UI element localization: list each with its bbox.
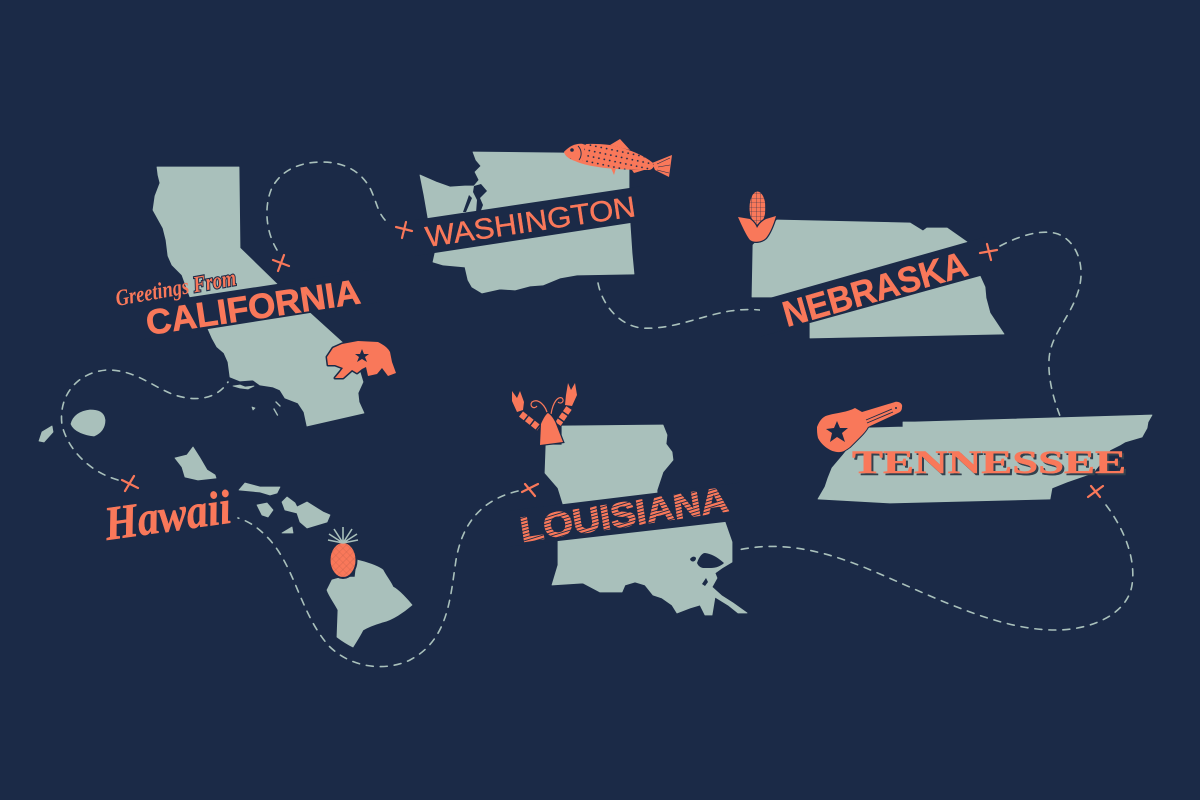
Louisiana state shape (545, 425, 747, 615)
Nebraska title: NEBRASKA (778, 243, 972, 335)
panel: California (114, 167, 396, 426)
icon: crawfish (512, 383, 577, 445)
panel: Nebraska (738, 192, 1004, 338)
panel: Louisiana (510, 383, 747, 615)
Hawaii title: Hawaii (100, 481, 235, 551)
panel: Hawaii (39, 410, 412, 647)
Tennessee title: TENNESSEE (854, 447, 1128, 483)
Tennessee title: TENNESSEE (852, 445, 1126, 481)
Louisiana banner (510, 483, 740, 546)
icon: bear (327, 341, 396, 378)
panel: Tennessee (817, 402, 1152, 503)
Nebraska banner (760, 237, 985, 337)
Louisiana title: LOUISIANA (517, 480, 731, 550)
Washington state shape (420, 152, 634, 293)
Greetings From script: Greetings From (114, 265, 238, 311)
California state shape (153, 167, 364, 426)
California banner (140, 268, 380, 340)
Tennessee title (852, 445, 1128, 483)
California title: CALIFORNIA (143, 272, 363, 343)
icon: fish (564, 139, 672, 177)
Tennessee state shape (818, 415, 1152, 503)
panel: Washington (415, 139, 672, 293)
Hawaiian islands (39, 410, 412, 647)
dashed travel routes (61, 162, 1133, 667)
icon: pineapple (328, 527, 358, 578)
icon: guitar (817, 402, 902, 452)
Atchafalaya lake cutouts (690, 553, 724, 586)
Washington banner (415, 186, 640, 256)
Washington title: WASHINGTON (423, 191, 638, 254)
Channel Islands specks (233, 385, 255, 410)
Nebraska state shape (752, 220, 1004, 338)
icon: corn (738, 192, 776, 242)
Puget Sound inlet (463, 184, 487, 213)
X markers (122, 222, 1103, 497)
